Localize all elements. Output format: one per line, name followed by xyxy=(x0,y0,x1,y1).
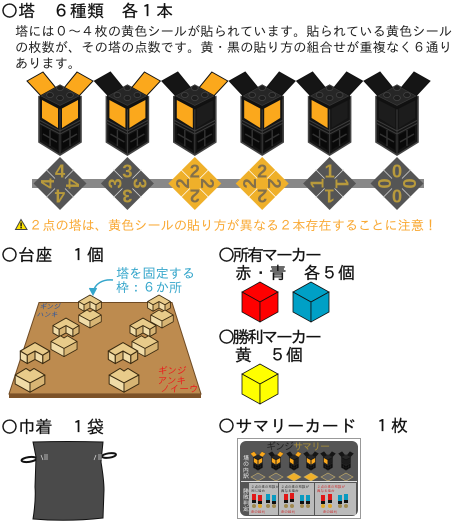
red board label: アンキ xyxy=(157,376,187,386)
frame bottom-center xyxy=(108,343,139,392)
card side labels: 塔 xyxy=(243,455,249,461)
tower 6: no yellow stickers xyxy=(364,72,430,155)
card panel captions: ２点の塔の枚数が xyxy=(317,485,346,489)
red marker cube xyxy=(242,282,278,322)
card panel pieces: 赤の勝利 xyxy=(281,509,296,514)
base: 2 points: 2 xyxy=(190,186,200,206)
base: 1 point xyxy=(303,157,356,210)
base: 0 points: 0 xyxy=(392,160,402,182)
warning note: ２点の塔は、黄色シールの貼り方が異なる２本存在することに注意！ xyxy=(29,218,437,232)
card side labels: 内 xyxy=(243,467,249,473)
frame mid-right xyxy=(130,318,158,357)
base: 4 points xyxy=(34,157,86,210)
blue board label: ハンキ xyxy=(36,311,59,318)
frame top-right xyxy=(148,295,173,328)
base: 0 points: 0 xyxy=(399,178,420,189)
pouch illustration xyxy=(21,442,116,520)
heading: owner markers: ○所有マーカー xyxy=(218,246,322,264)
heading: victory markers: 黄 ５個 xyxy=(235,346,303,364)
red board label: ノイーウ xyxy=(160,384,199,394)
card panel captions: 同じ場合 xyxy=(251,488,266,493)
description text: の枚数が、その塔の点数です。黄・黒の貼り方の組合せが重複なく６通り xyxy=(15,40,452,54)
tower 4: two yellow stickers xyxy=(229,72,295,155)
card divider xyxy=(241,481,357,482)
card side labels: 定 xyxy=(243,506,249,512)
base: 1 point: 1 xyxy=(307,178,328,189)
icon: warning triangle xyxy=(16,220,27,230)
card panel captions: 異なる場合 xyxy=(317,489,335,493)
base: 2 points: 2 xyxy=(257,186,267,206)
description text xyxy=(15,24,452,70)
base: 2 points xyxy=(168,157,221,210)
card mini towers xyxy=(250,452,354,471)
heading: owner markers xyxy=(218,246,355,282)
towers row xyxy=(27,72,430,155)
blue board label: ギンジ xyxy=(39,303,62,310)
base: 3 points: 3 xyxy=(122,186,133,206)
base: 2 points xyxy=(236,157,289,210)
frame mid-left xyxy=(51,318,79,357)
card panel captions: ２点の塔の枚数が xyxy=(251,485,280,489)
arrow: callout to frame xyxy=(90,280,113,294)
card panel pieces xyxy=(251,493,348,514)
card side labels: の xyxy=(243,461,249,467)
tower 1: four yellow stickers xyxy=(27,72,93,155)
frame bottom-left xyxy=(15,343,50,392)
callout: frame note xyxy=(90,266,195,294)
blue board label xyxy=(36,303,62,318)
card side labels: 勝 xyxy=(243,487,249,494)
card side labels: 訳 xyxy=(243,473,249,479)
red board label: ギンジ xyxy=(157,365,187,376)
heading: victory markers xyxy=(218,329,322,364)
base: 0 points: 0 xyxy=(374,178,395,189)
base: 3 points: 3 xyxy=(122,160,133,182)
red board label xyxy=(155,365,202,394)
card side labels: 敗 xyxy=(243,493,249,500)
blue marker cube xyxy=(293,282,329,322)
base: 2 points: 2 xyxy=(264,178,285,189)
summary card xyxy=(238,438,360,518)
base: 4 points: 4 xyxy=(54,186,65,206)
base: 1 point: 1 xyxy=(324,186,335,206)
base: 3 points xyxy=(101,157,154,210)
card title: ギンジサマリー xyxy=(266,441,330,452)
base: 1 point: 1 xyxy=(332,178,353,189)
board surface xyxy=(9,302,201,398)
card mini bases xyxy=(251,473,353,481)
base: 1 point: 1 xyxy=(324,160,335,182)
heading: summary card: ○サマリーカード １枚 xyxy=(218,417,408,435)
callout: frame note: 枠：６か所 xyxy=(116,280,182,294)
base: 0 points xyxy=(370,157,424,210)
base: 3 points: 3 xyxy=(104,178,125,189)
base: 3 points: 3 xyxy=(129,178,150,189)
heading: victory markers: ○勝利マーカー xyxy=(218,329,322,346)
callout: frame note: 塔を固定する xyxy=(116,266,195,280)
card panel captions: 異なる場合 xyxy=(281,489,299,493)
heading: owner markers: 赤・青 各５個 xyxy=(235,264,355,282)
heading: pouch: ○巾着 １袋 xyxy=(1,418,104,436)
card panel captions xyxy=(251,485,346,493)
card panel captions: ２点の塔の枚数が xyxy=(281,485,310,489)
pouch eyelets xyxy=(41,454,101,460)
card panels xyxy=(249,483,356,515)
base: 4 points: 4 xyxy=(55,160,66,182)
yellow marker cube xyxy=(242,364,278,404)
tower bases with points xyxy=(34,157,424,210)
card side labels: 判 xyxy=(243,500,249,506)
pouch body xyxy=(33,442,104,520)
card side labels xyxy=(243,455,249,512)
frame top-left xyxy=(79,295,101,328)
description text: 塔には０～４枚の黄色シールが貼られています。貼られている黄色シール xyxy=(15,24,452,38)
heading: base board: ○台座 １個 xyxy=(1,246,104,264)
base: 2 points: 2 xyxy=(239,178,260,189)
base: 2 points: 2 xyxy=(190,160,200,182)
card panel pieces: 赤の勝利 xyxy=(251,509,266,514)
tower 2: three yellow stickers xyxy=(94,72,160,155)
base: 2 points: 2 xyxy=(257,160,267,182)
description text: あります。 xyxy=(15,56,81,70)
base: 0 points: 0 xyxy=(392,186,402,206)
base: 2 points: 2 xyxy=(197,178,218,189)
base: 2 points: 2 xyxy=(172,178,193,189)
tower 5: one yellow sticker xyxy=(297,72,363,155)
tower scoring bar xyxy=(32,179,424,188)
base: 4 points: 4 xyxy=(62,178,83,189)
base: 4 points: 4 xyxy=(37,178,58,189)
card panel pieces: 赤の勝利 xyxy=(323,509,338,514)
pouch strings xyxy=(21,452,116,463)
heading: towers: ○塔 ６種類 各１本 xyxy=(1,2,173,20)
board illustration xyxy=(9,295,202,398)
tower 3: two yellow stickers xyxy=(162,72,228,155)
